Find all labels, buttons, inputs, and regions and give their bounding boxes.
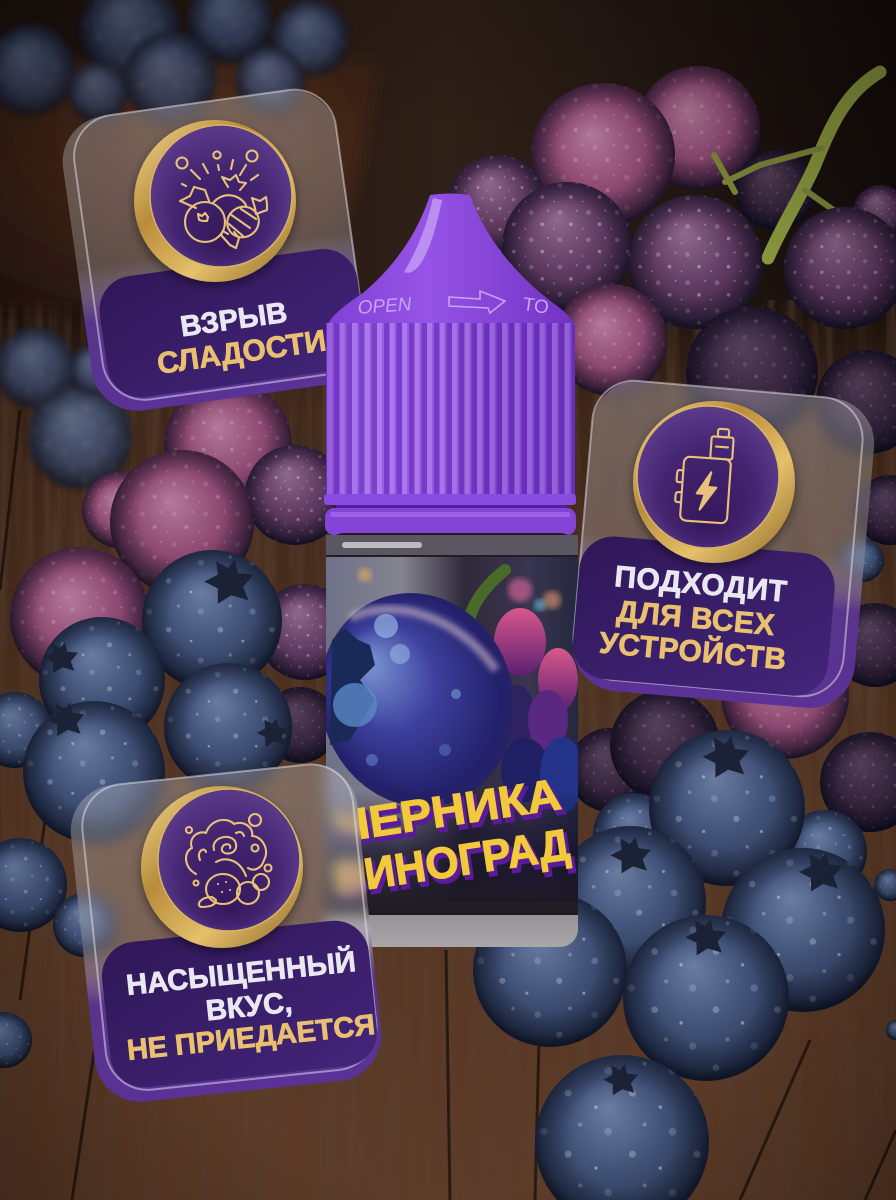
glass plate	[569, 377, 878, 712]
cap nozzle	[326, 194, 575, 345]
coin icon: flavour cloud and fruits	[141, 786, 303, 948]
text: СЛАДОСТИ: СЛАДОСТИ	[155, 324, 328, 381]
blueberries right	[473, 730, 896, 1200]
cap lettering: TO	[521, 294, 550, 319]
coin icon: sweets	[134, 120, 296, 282]
label artwork	[326, 557, 578, 902]
grapes lower right	[568, 538, 896, 832]
dark backdrop	[0, 0, 896, 340]
product name: ЧЕРНИКА: ЧЕРНИКА	[336, 774, 567, 856]
text plate	[570, 534, 837, 698]
product name: ВИНОГРАД: ВИНОГРАД	[333, 824, 576, 908]
text: ДЛЯ ВСЕХ: ДЛЯ ВСЕХ	[615, 595, 776, 642]
text: ВЗРЫВ: ВЗРЫВ	[178, 297, 289, 343]
glass plate	[57, 84, 371, 417]
card: НАСЫЩЕННЫЙ ВКУС, НЕ ПРИЕДАЕТСЯ	[70, 763, 382, 1102]
text: ПОДХОДИТ: ПОДХОДИТ	[613, 560, 789, 609]
text: ВКУС,: ВКУС,	[204, 987, 294, 1027]
text: НАСЫЩЕННЫЙ: НАСЫЩЕННЫЙ	[125, 944, 357, 1002]
text plate	[99, 917, 380, 1091]
grapes upper right	[447, 66, 896, 545]
dark label base	[326, 790, 578, 915]
card: ВЗРЫВ СЛАДОСТИ	[62, 88, 361, 411]
blurred wooden bowl	[0, 60, 380, 308]
ribbed cap body	[324, 323, 576, 535]
big blueberry	[326, 593, 514, 806]
glass bottle with label	[292, 533, 584, 947]
coin icon: vape device	[633, 401, 795, 563]
cap lettering: OPEN	[357, 294, 412, 319]
text: НЕ ПРИЕДАЕТСЯ: НЕ ПРИЕДАЕТСЯ	[125, 1009, 377, 1067]
grapes left	[10, 381, 353, 763]
card: ПОДХОДИТ ДЛЯ ВСЕХ УСТРОЙСТВ	[572, 380, 874, 708]
glass plate	[66, 760, 386, 1106]
grape stem	[714, 72, 880, 258]
wooden table	[0, 300, 896, 1200]
text plate	[95, 245, 370, 402]
product name: ВИНОГРАД: ВИНОГРАД	[330, 820, 573, 904]
cap lettering	[357, 291, 550, 319]
blueberries left	[0, 550, 292, 1068]
grapes on label	[494, 608, 546, 676]
bottle	[318, 194, 586, 953]
text: УСТРОЙСТВ: УСТРОЙСТВ	[598, 626, 788, 676]
blurred blueberries	[0, 0, 348, 489]
product name: ЧЕРНИКА: ЧЕРНИКА	[333, 770, 564, 852]
